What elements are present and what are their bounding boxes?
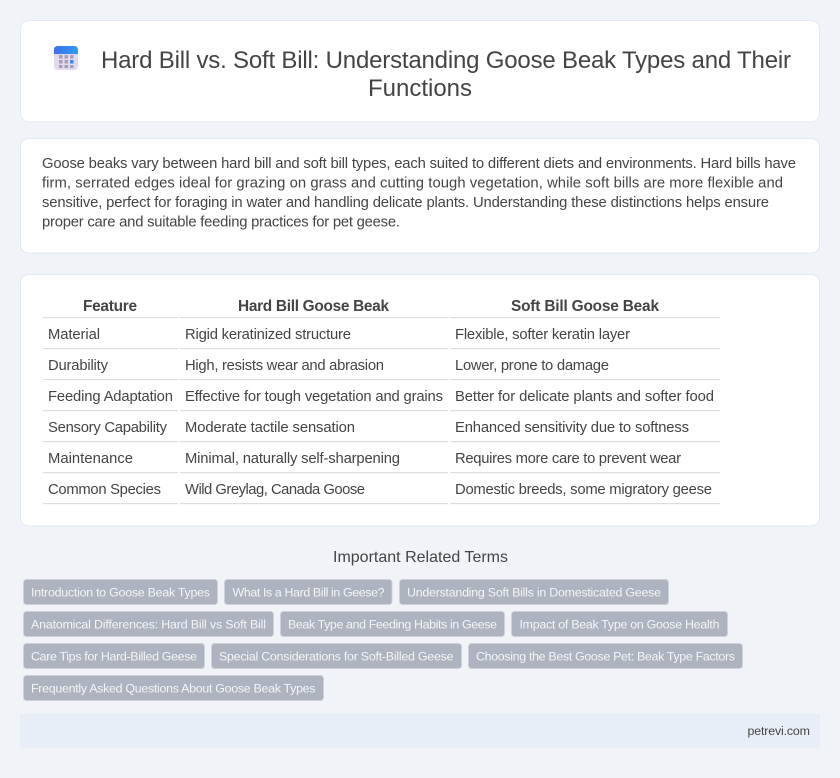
table row: common species <box>48 482 712 498</box>
table row: feeding adaptation: Better for delicate plants and softer food <box>455 389 714 405</box>
chip: special considerations: Special Considerations for Soft-Billed Geese <box>219 650 454 664</box>
chip: soft bills <box>400 580 668 604</box>
table row: feeding adaptation: Feeding Adaptation <box>48 389 173 405</box>
table row: durability: Lower, prone to damage <box>455 358 609 374</box>
chip: hard bill: What Is a Hard Bill in Geese? <box>232 586 385 600</box>
chip: anatomical differences: Anatomical Differences: Hard Bill vs Soft Bill <box>31 618 266 632</box>
table row: maintenance: Minimal, naturally self-sharpening <box>185 451 400 467</box>
icon: calendar grid <box>54 46 78 70</box>
text block: introduction paragraph: Goose beaks vary between hard bill and soft bill types, each suited to different diets and environments. Hard bills have <box>42 156 796 172</box>
table row: material: Material <box>48 327 100 343</box>
table row: common species: Domestic breeds, some migratory geese <box>455 482 712 498</box>
table row: maintenance: Maintenance <box>48 451 133 467</box>
table header: Feature <box>83 298 137 315</box>
table row: sensory capability: Enhanced sensitivity due to softness <box>455 420 689 436</box>
chip: care tips: Care Tips for Hard-Billed Geese <box>31 650 197 664</box>
table header <box>83 298 659 315</box>
footer bar <box>20 714 820 748</box>
table row: common species: Wild Greylag, Canada Goose <box>185 482 365 498</box>
title: Hard Bill vs. Soft Bill: Understanding Goose Beak Types and Their <box>101 47 791 74</box>
title <box>101 47 791 102</box>
chip: introduction <box>24 580 218 604</box>
table row: durability <box>48 358 609 374</box>
chip: choosing pet <box>468 644 742 668</box>
chip: soft bills: Understanding Soft Bills in Domesticated Geese <box>407 586 661 600</box>
table row: feeding adaptation <box>48 389 714 405</box>
chip: goose health: Impact of Beak Type on Goose Health <box>520 618 720 632</box>
table header: Hard Bill Goose Beak <box>238 298 389 315</box>
text block: introduction paragraph: proper care and suitable feeding practices for pet geese. <box>42 214 400 230</box>
table row: material: Rigid keratinized structure <box>185 327 351 343</box>
table row: common species: Common Species <box>48 482 161 498</box>
chip: special considerations <box>212 644 462 668</box>
table row: material <box>48 327 630 343</box>
panel: comparison table <box>20 274 820 526</box>
text block: introduction paragraph: firm, serrated edges ideal for grazing on grass and cutting tough vegetation, while soft bills are more flexible and <box>42 176 783 192</box>
chip: anatomical differences <box>24 612 274 636</box>
table header: Soft Bill Goose Beak <box>511 298 659 315</box>
table row: feeding adaptation: Effective for tough vegetation and grains <box>185 389 443 405</box>
footer source text: petrevi.com <box>748 724 810 738</box>
panel: introduction <box>20 138 820 253</box>
table row: sensory capability: Moderate tactile sensation <box>185 420 355 436</box>
table row: durability: High, resists wear and abrasion <box>185 358 384 374</box>
chip: care tips <box>24 644 204 668</box>
chip: choosing pet: Choosing the Best Goose Pet: Beak Type Factors <box>476 650 735 664</box>
table row: maintenance: Requires more care to prevent wear <box>455 451 681 467</box>
title: Functions <box>368 75 472 102</box>
chip: faq <box>24 676 324 700</box>
chip: introduction: Introduction to Goose Beak Types <box>31 586 210 600</box>
table row: sensory capability <box>48 420 689 436</box>
heading: important related terms: Important Related Terms <box>333 549 508 566</box>
table row: durability: Durability <box>48 358 109 374</box>
chip: hard bill <box>224 580 392 604</box>
chip: goose health <box>512 612 728 636</box>
text block: introduction paragraph <box>42 156 796 230</box>
chip: faq: Frequently Asked Questions About Goose Beak Types <box>31 682 316 696</box>
table row: sensory capability: Sensory Capability <box>48 420 168 436</box>
panel: related term chips <box>24 580 742 700</box>
text block: introduction paragraph: sensitive, perfect for foraging in water and handling delicate plants. Understanding these distinctions helps ensure <box>42 195 769 211</box>
table row: material: Flexible, softer keratin layer <box>455 327 630 343</box>
panel: title card <box>20 20 820 122</box>
chip: feeding habits: Beak Type and Feeding Habits in Geese <box>288 618 497 632</box>
table row: maintenance <box>48 451 681 467</box>
chip: feeding habits <box>280 612 504 636</box>
